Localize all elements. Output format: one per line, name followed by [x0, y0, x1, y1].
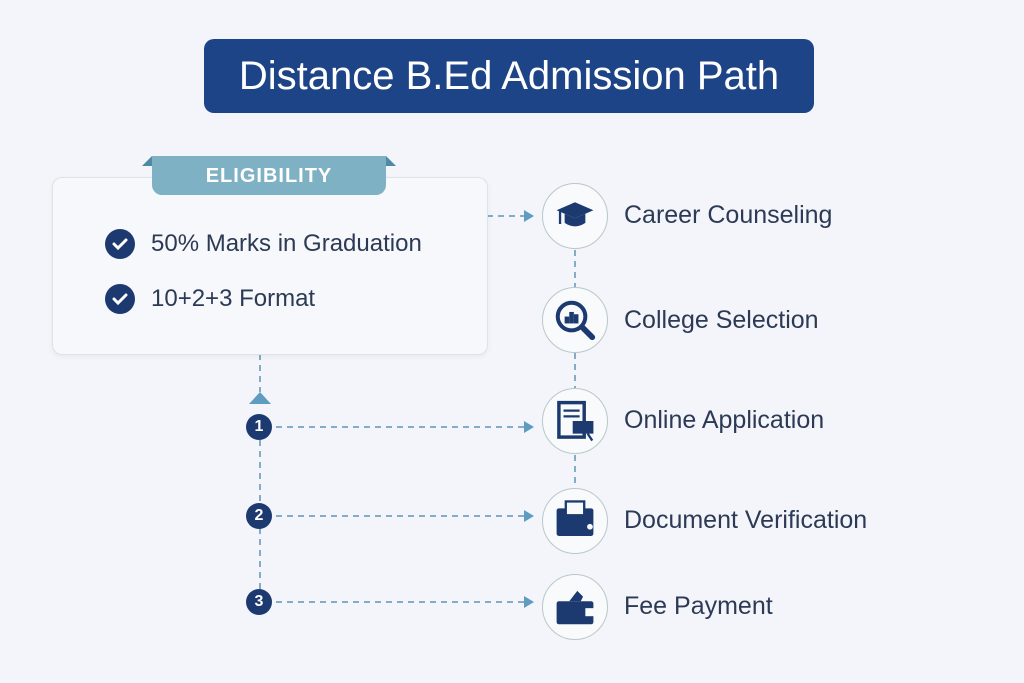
bullet: 50% marks: 50% Marks in Graduation [151, 230, 422, 257]
icon: graduation cap [542, 183, 608, 249]
panel: eligibility [52, 177, 488, 355]
number badges: 2 [255, 507, 263, 524]
heading: eligibility tab [142, 156, 396, 195]
title [204, 39, 814, 113]
step: fee payment: Fee Payment [624, 592, 773, 620]
step: fee payment [542, 574, 773, 640]
icon: form with card [542, 388, 608, 454]
step: document verification: Document Verification [624, 506, 867, 534]
step: document verification [542, 488, 867, 554]
icon: wallet [542, 574, 608, 640]
number badges [246, 414, 272, 615]
icon: folder [542, 488, 608, 554]
heading: eligibility tab: ELIGIBILITY [206, 165, 332, 187]
step: career counseling [542, 183, 832, 249]
title: Distance B.Ed Admission Path [239, 54, 779, 98]
number badges: 1 [255, 418, 263, 435]
step: career counseling: Career Counseling [624, 201, 832, 229]
step: college selection: College Selection [624, 306, 819, 334]
icon: magnifier [542, 287, 608, 353]
step: online application: Online Application [624, 406, 824, 434]
step: college selection [542, 287, 819, 353]
number badges: 3 [255, 593, 263, 610]
step: online application [542, 388, 824, 454]
bullet: 10+2+3: 10+2+3 Format [151, 285, 315, 312]
